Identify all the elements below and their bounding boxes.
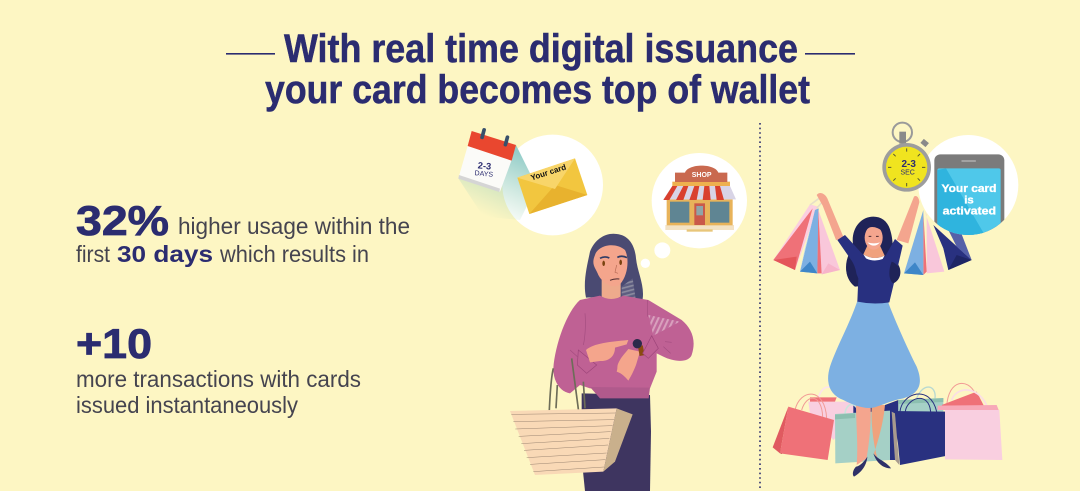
stat: 32% higher usage: 32%	[76, 197, 169, 244]
bags left hand	[773, 198, 840, 274]
hair fringe	[863, 218, 885, 236]
icon: calendar 2-3 days	[458, 128, 537, 220]
sleeve shading	[648, 315, 680, 336]
icon: calendar 2-3 days: 2-3	[477, 160, 492, 172]
icon: envelope with your card: Your card	[530, 163, 567, 182]
skirt	[828, 300, 920, 408]
pink bag right	[938, 405, 1002, 460]
thought dot large	[654, 242, 670, 258]
right leg	[872, 405, 885, 458]
back teal bag	[898, 387, 943, 412]
teal bag	[835, 404, 890, 463]
shopping bags on the floor	[773, 300, 1002, 477]
bubble: shop	[652, 153, 747, 248]
hair	[585, 234, 643, 300]
stat: +10 more transactions: +10	[76, 320, 152, 367]
collar	[863, 254, 885, 261]
icon: stopwatch 2-3 sec: 2-3	[901, 159, 916, 170]
icon: calendar 2-3 days: DAYS	[474, 170, 494, 179]
sweater	[553, 296, 694, 393]
stat: 32% higher usage: 30 days	[117, 241, 213, 267]
smile	[867, 242, 880, 246]
bags right hand	[904, 210, 972, 275]
icon: phone with card activated: activated	[943, 206, 996, 218]
face	[593, 245, 628, 286]
icon: phone with card activated: is	[964, 194, 974, 206]
stat: 32% higher usage: higher usage within the	[178, 213, 410, 239]
stat: +10 more transactions: more transactions with cards	[76, 366, 361, 392]
tote bag	[510, 358, 633, 475]
eyes	[869, 235, 879, 238]
thought bubbles: card delivery and shop	[502, 135, 747, 268]
red bag	[773, 394, 834, 460]
trousers	[582, 393, 651, 491]
icon: phone with card activated	[934, 154, 1004, 241]
neck	[602, 280, 621, 299]
facial features	[600, 256, 627, 280]
neck	[863, 246, 885, 258]
icon: stopwatch 2-3 sec	[882, 123, 931, 192]
arms	[817, 193, 919, 243]
hair highlight	[622, 278, 636, 299]
hair locks over top	[846, 258, 900, 287]
shoes	[853, 453, 891, 477]
face	[865, 226, 883, 250]
stat: 32% higher usage	[76, 197, 410, 267]
left leg	[856, 405, 871, 465]
top	[837, 235, 903, 304]
icon: stopwatch 2-3 sec: SEC	[900, 170, 915, 177]
illustration: woman holding shopping bags	[773, 123, 1018, 304]
stat: 32% higher usage: first	[76, 241, 111, 267]
icon: envelope with your card	[517, 158, 587, 214]
navy bag behind	[853, 400, 898, 460]
thought dot small	[641, 259, 650, 268]
icon: shop: SHOP	[692, 172, 712, 179]
hair	[846, 217, 900, 287]
stat: +10 more transactions: issued instantaneously	[76, 392, 298, 418]
title	[226, 27, 855, 112]
title: With real time digital issuance	[284, 27, 798, 71]
icon: phone with card activated: Your card	[941, 183, 997, 195]
stat: +10 more transactions	[76, 320, 361, 418]
bubble: envelope	[502, 135, 603, 235]
cuffs	[577, 336, 658, 373]
illustration: woman checking her watch	[510, 234, 694, 491]
navy bag front	[892, 394, 951, 465]
title: your card becomes top of wallet	[265, 68, 810, 112]
back red bag right	[942, 383, 987, 410]
icon: shop	[663, 166, 736, 232]
stat: 32% higher usage: which results in	[219, 241, 369, 267]
back pink bag	[808, 387, 855, 440]
far hand	[617, 349, 640, 381]
wrist watch	[633, 339, 645, 356]
pointing hand	[586, 340, 628, 362]
bubble: phone	[918, 135, 1018, 235]
sweater hem	[590, 387, 650, 398]
sweater fold lines	[570, 300, 672, 357]
